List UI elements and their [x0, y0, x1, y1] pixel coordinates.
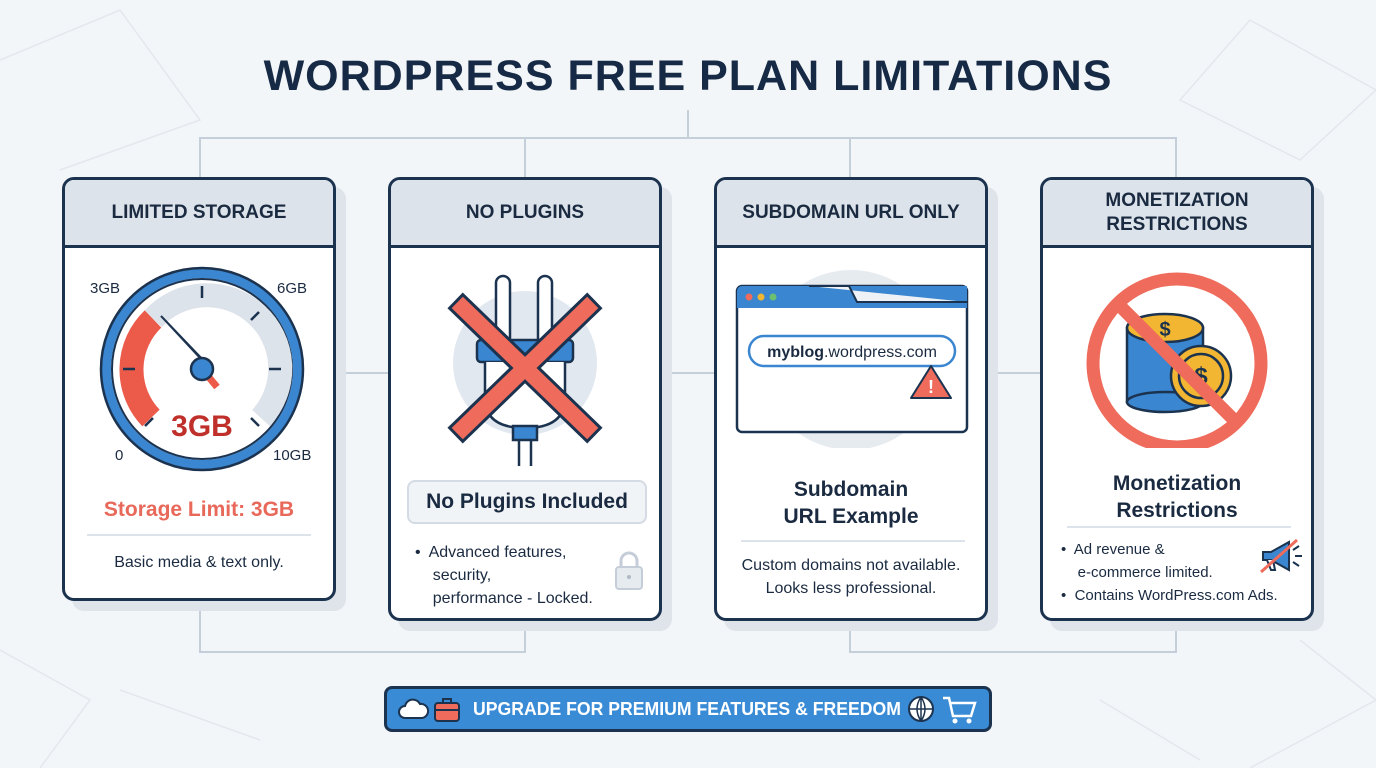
icon: browser window: myblog.wordpress.com [767, 344, 937, 361]
panel: no plugins [388, 177, 662, 621]
description: Basic media & text only. [114, 554, 284, 571]
icon: banned coins: $ [1194, 363, 1208, 390]
description [742, 557, 960, 597]
icon: cart [943, 696, 977, 724]
heading: monetization restrictions [1043, 180, 1311, 248]
icon: briefcase [434, 698, 460, 722]
bullet text: security, [433, 567, 491, 584]
bullet text: performance - Locked. [433, 590, 593, 607]
heading: subdomain url only: SUBDOMAIN URL ONLY [742, 202, 960, 222]
icon: browser window: ! [928, 377, 934, 397]
bullet text: • Ad revenue & [1061, 541, 1165, 558]
callout: no plugins included: No Plugins Included [426, 490, 628, 513]
subheading: subdomain url example [784, 478, 918, 528]
icon: banned coins: $ [1159, 319, 1171, 341]
description: Custom domains not available. [742, 557, 960, 574]
icon: browser window [736, 270, 968, 448]
description: Looks less professional. [766, 580, 936, 597]
gauge chart: 0 [115, 447, 123, 464]
gauge chart: 10GB [273, 447, 311, 464]
heading: subdomain url only [717, 180, 985, 248]
heading: limited storage: LIMITED STORAGE [112, 202, 286, 222]
panel: limited storage [62, 177, 336, 601]
subheading: monetization restrictions [1113, 472, 1241, 522]
bullet text: • Advanced features, [415, 544, 566, 561]
heading: no plugins [391, 180, 659, 248]
gauge chart: 6GB [277, 280, 307, 297]
bullet text [1061, 541, 1278, 604]
panel: monetization restrictions [1040, 177, 1314, 621]
bullet text [415, 544, 593, 607]
icon: globe [908, 696, 934, 722]
subheading: monetization restrictions: Restrictions [1116, 499, 1238, 522]
icon: lock [615, 552, 643, 590]
panel: subdomain url [714, 177, 988, 621]
gauge chart [90, 266, 311, 472]
subheading: subdomain url example: URL Example [784, 505, 918, 528]
title: WORDPRESS FREE PLAN LIMITATIONS [264, 52, 1112, 100]
banner: upgrade [384, 686, 992, 732]
icon: banned coins [1086, 272, 1268, 448]
heading: monetization restrictions: RESTRICTIONS [1106, 214, 1248, 234]
icon: muted megaphone [1260, 539, 1302, 573]
gauge chart: 3GB [171, 410, 233, 443]
callout: no plugins included [407, 480, 647, 524]
heading: no plugins: NO PLUGINS [466, 202, 584, 222]
gauge chart: 3GB [90, 280, 120, 297]
icon: cloud [398, 698, 429, 719]
bullet text: e-commerce limited. [1078, 564, 1213, 581]
subheading: subdomain url example: Subdomain [794, 478, 908, 501]
icon: crossed plug [448, 274, 602, 466]
subheading: monetization restrictions: Monetization [1113, 472, 1241, 495]
heading: limited storage [65, 180, 333, 248]
banner text: UPGRADE FOR PREMIUM FEATURES & FREEDOM [473, 699, 901, 719]
storage limit text: Storage Limit: 3GB [104, 498, 294, 521]
heading: monetization restrictions: MONETIZATION [1105, 190, 1249, 210]
bullet text: • Contains WordPress.com Ads. [1061, 587, 1278, 604]
